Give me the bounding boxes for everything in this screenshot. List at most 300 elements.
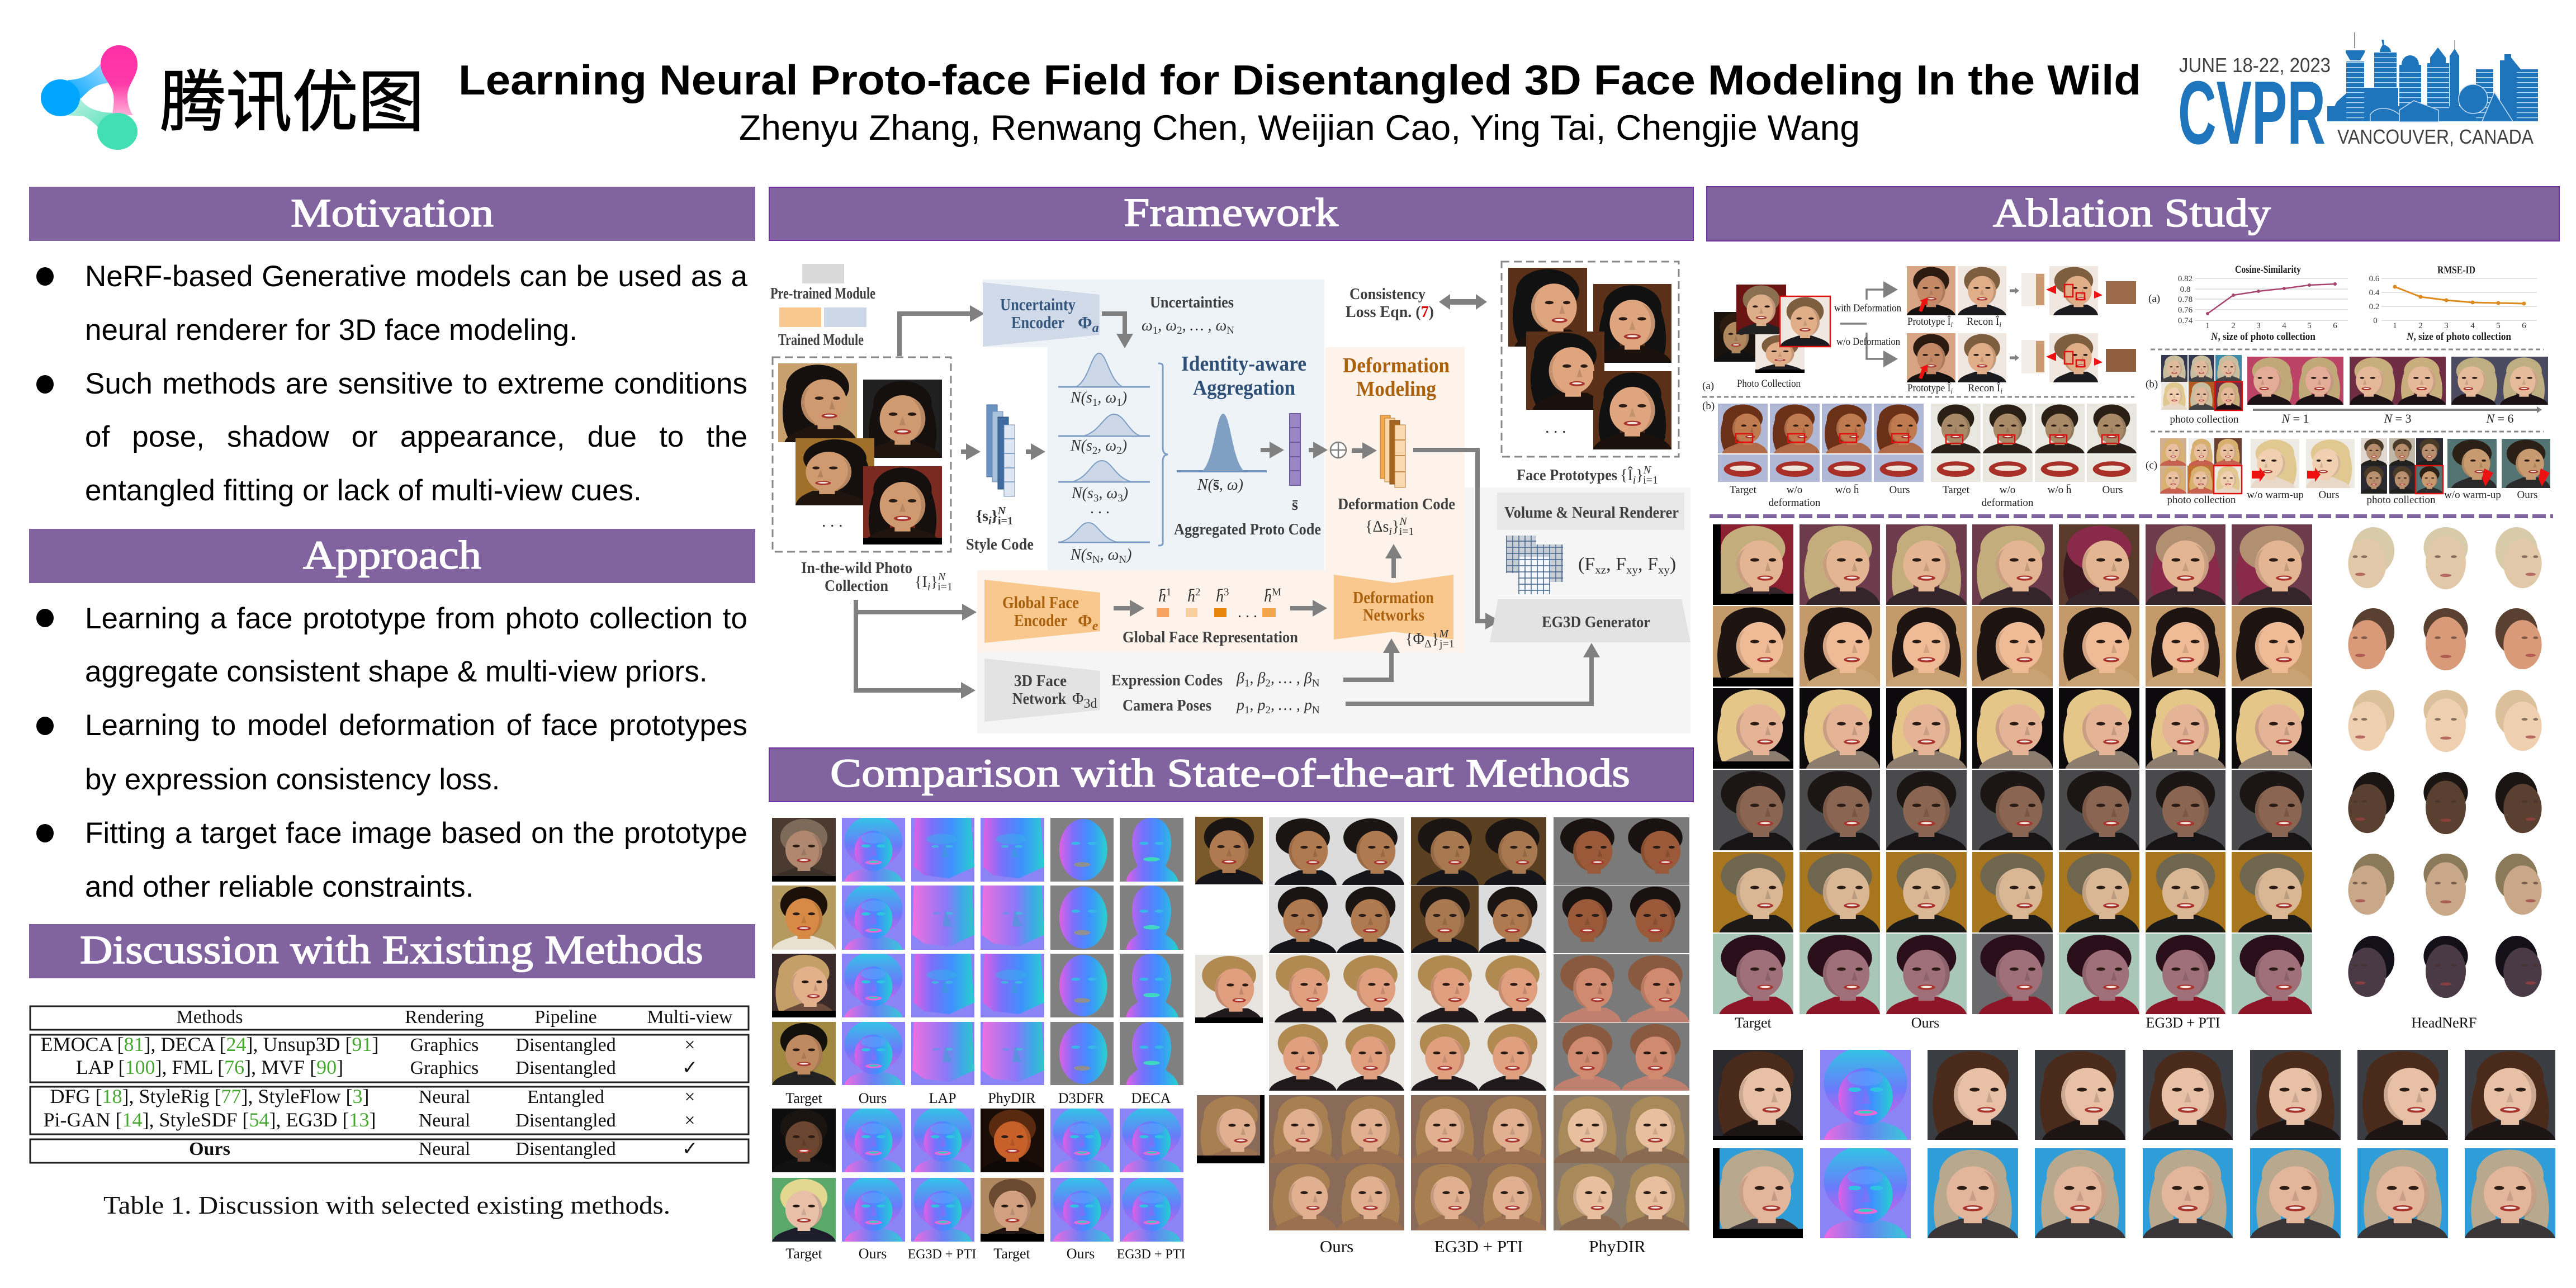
uncertainties: 1 [1153, 325, 1158, 337]
ablation c: warm-up: w/o warm-up [2247, 489, 2304, 501]
global face representation: h̄ [1264, 588, 1272, 605]
uncertainty encoder: Uncertainty [1000, 295, 1076, 314]
heading: Comparison with State-of-the-art Methods [769, 748, 1693, 802]
3D face network: Φ [1072, 690, 1083, 708]
volume and neural renderer: xz [1595, 563, 1606, 576]
volume and neural renderer: xy [1658, 563, 1670, 576]
input photo collection: . . . [822, 512, 843, 531]
style code stack: i [988, 515, 992, 527]
gaussian distributions: 3 [1093, 493, 1098, 504]
method labels: PhyDIR [988, 1090, 1036, 1106]
expression codes and camera poses [1111, 651, 1592, 716]
volume and neural renderer: , F [1638, 554, 1658, 575]
row: EG3D normals 2 [772, 1176, 1183, 1242]
chart: Cosine-Similarity: 4 [2282, 321, 2286, 330]
panel: novel view comparison [1195, 817, 1689, 1256]
gaussian distributions: N(s [1071, 437, 1092, 454]
with/without deformation branch: with Deformation [1834, 302, 1901, 314]
global face representation: 3 [1224, 586, 1229, 598]
consistency loss: Consistency [1349, 286, 1426, 303]
row: sunglasses woman [1713, 688, 2312, 769]
heading: Discussion with Existing Methods: Discussion with Existing Methods [80, 927, 703, 972]
panel: novel view results grid [1713, 524, 2542, 1031]
volume and neural renderer: , F [1606, 554, 1626, 575]
input labels: Collection [825, 577, 888, 595]
heading: Approach: Approach [303, 533, 481, 577]
gaussian distributions: N(s [1071, 546, 1092, 564]
chart: RMSE-ID: 2 [2418, 321, 2423, 330]
row: red jacket man [1713, 934, 2312, 1014]
table rows: × [684, 1035, 695, 1055]
volume and neural renderer: Volume & Neural Renderer [1504, 504, 1679, 522]
identity-aware aggregation: s̄ [1292, 496, 1298, 514]
deformation modeling: {Δs [1365, 518, 1389, 536]
deformation networks: j=1 [1439, 638, 1455, 650]
global face encoder: Global Face [1002, 593, 1079, 612]
without deformation results: i [2000, 387, 2002, 396]
method labels lower: Ours [859, 1246, 887, 1262]
arrows: from input [856, 314, 1125, 690]
face prototypes: N [1643, 464, 1652, 476]
ablation b: expression comparison: Ours [2103, 484, 2123, 496]
without deformation results: Prototype Î [1907, 382, 1955, 394]
table rows: Entangled [527, 1087, 604, 1107]
method labels [785, 1090, 1171, 1106]
uncertainty encoder: a [1092, 321, 1099, 335]
deformation networks: {Φ [1405, 631, 1424, 648]
chart: RMSE-ID: 4 [2470, 321, 2475, 330]
expression codes and camera poses: , β [1249, 670, 1265, 687]
table rows: ✓ [682, 1138, 698, 1160]
logo: tencent youtu [41, 45, 424, 150]
consistency loss [1346, 286, 1487, 321]
row: EG3D normals 1 [772, 1106, 1183, 1172]
uncertainties: , ω [1158, 317, 1177, 334]
method labels: DECA [1131, 1090, 1171, 1106]
3D face network: Network [1012, 690, 1066, 708]
person 2 [1269, 954, 1689, 1091]
gaussian distributions: N [1092, 554, 1100, 566]
global face representation: . . . [1238, 604, 1257, 621]
method labels lower: Ours [1067, 1246, 1095, 1262]
table rows: Disentangled [515, 1058, 616, 1078]
ablation b: photo collection size: photo collection [2170, 414, 2239, 425]
panel: normal map comparison [772, 816, 1185, 1262]
consistency loss: Loss Eqn. (7) [1346, 304, 1434, 321]
chart: Cosine-Similarity: 0.78 [2178, 295, 2193, 304]
table rows: Graphics [410, 1058, 479, 1078]
style code stack: Style Code [966, 536, 1034, 553]
gaussian distributions: , ω [1097, 389, 1116, 406]
gaussian distributions [1058, 353, 1168, 566]
gaussian distributions: , ω [1097, 437, 1116, 454]
ablation b: expression comparison: Ours [1890, 484, 1910, 496]
labels [1320, 1237, 1646, 1256]
table rows: ✓ [682, 1057, 698, 1079]
expression codes and camera poses: , p [1250, 697, 1266, 714]
chart: RMSE-ID: 0.6 [2369, 274, 2380, 283]
labels [1735, 1015, 2476, 1031]
heading: Discussion with Existing Methods [29, 924, 755, 978]
legend [770, 264, 875, 349]
input photo collection [773, 357, 951, 552]
ablation b: photo collection size: N = 3 [2383, 411, 2412, 425]
without deformation results: i [1950, 387, 1953, 396]
chart: Cosine-Similarity: Cosine-Similarity [2235, 264, 2301, 276]
text block: motivation bullets: neural renderer for 3D face modeling. [85, 314, 577, 347]
input labels: } [930, 574, 938, 591]
table caption: Table 1. Discussion with selected existing methods. [103, 1191, 670, 1219]
table rows: Disentangled [515, 1035, 616, 1055]
labels: EG3D + PTI [1434, 1237, 1523, 1256]
with deformation results [1907, 266, 2136, 329]
heading: Framework: Framework [1124, 190, 1338, 235]
row: shadowed man [1713, 770, 2312, 850]
face prototypes: Face Prototypes [1517, 467, 1617, 484]
gaussian distributions: 2 [1092, 445, 1097, 457]
uncertainties [1142, 294, 1234, 337]
style code stack [966, 405, 1034, 553]
chart: Cosine-Similarity: 0.8 [2180, 285, 2190, 294]
global face encoder: e [1092, 619, 1098, 633]
chart: RMSE-ID: 3 [2444, 321, 2449, 330]
labels: PhyDIR [1589, 1237, 1646, 1256]
input labels: i=1 [937, 581, 953, 593]
3D face network: 3d [1083, 697, 1097, 711]
method labels lower: Target [993, 1246, 1031, 1262]
uncertainties: N [1227, 325, 1234, 337]
global face representation [1114, 586, 1314, 646]
chart: RMSE-ID: 5 [2496, 321, 2501, 330]
chart: Cosine-Similarity: N, size of photo collection [2210, 331, 2315, 343]
chart: RMSE-ID: 1 [2393, 321, 2397, 330]
row: dark-hair woman [1713, 606, 2312, 686]
deformation networks: Δ [1424, 638, 1432, 650]
gaussian distributions: . . . [1090, 500, 1110, 517]
row: man with hand [772, 1020, 1183, 1085]
table header: Pipeline [534, 1007, 597, 1027]
heading: Ablation Study [1707, 187, 2559, 241]
chart: Cosine-Similarity: 6 [2333, 321, 2337, 330]
title: Learning Neural Proto-face Field for Disentangled 3D Face Modeling In the Wild [458, 56, 2141, 103]
gaussian distributions: 3 [1117, 493, 1123, 504]
CVPR wordmark: CVPR [2178, 63, 2326, 163]
authors: Zhenyu Zhang, Renwang Chen, Weijian Cao, Ying Tai, Chengjie Wang [739, 108, 1860, 148]
deformation modeling: N [1399, 515, 1408, 528]
uncertainties: 2 [1177, 325, 1182, 337]
uncertainty encoder: Encoder [1011, 312, 1064, 332]
expression codes and camera poses: β [1237, 670, 1244, 687]
gaussian distributions: , ω [1098, 485, 1117, 502]
heading: Approach [29, 529, 755, 583]
text block: motivation bullets: of pose, shadow or appearance, due to the [85, 420, 747, 453]
background regions [977, 280, 1690, 733]
icon: three-lobed logo mark [41, 45, 138, 150]
style code stack: i=1 [998, 515, 1013, 527]
face prototypes [1502, 262, 1679, 486]
face prototypes: i [1633, 474, 1636, 486]
labels: HeadNeRF [2412, 1015, 2476, 1031]
location: VANCOUVER, CANADA [2337, 125, 2534, 148]
row: blonde woman [1713, 524, 2312, 605]
table rows: EMOCA [81], DECA [24], Unsup3D [91] [40, 1033, 379, 1055]
input labels: i [927, 581, 930, 593]
expression codes and camera poses: N [1312, 678, 1320, 689]
chart: Cosine-Similarity: 1 [2205, 321, 2210, 330]
volume and neural renderer: xy [1626, 563, 1638, 576]
uncertainty encoder [983, 282, 1100, 347]
ablation b: expression comparison: Target [1943, 484, 1970, 496]
chart: Cosine-Similarity [2178, 264, 2348, 343]
deformation modeling: Deformation Code [1338, 496, 1455, 513]
chart: RMSE-ID: 6 [2522, 321, 2526, 330]
face prototypes: . . . [1545, 418, 1566, 437]
table header: Methods [177, 1007, 243, 1027]
identity-aware aggregation: N(s̄, ω) [1197, 476, 1243, 494]
uncertainties: ω [1142, 317, 1153, 334]
global face representation: 2 [1195, 586, 1201, 598]
table rows: × [684, 1087, 695, 1107]
global face representation: h̄ [1158, 588, 1166, 605]
chart: Cosine-Similarity: 0.82 [2178, 274, 2193, 283]
chart: Cosine-Similarity: 3 [2256, 321, 2261, 330]
deformation networks: } [1432, 631, 1439, 648]
global face encoder: Encoder [1014, 610, 1067, 630]
table rows: × [684, 1110, 695, 1131]
expression codes and camera poses: p [1237, 697, 1244, 714]
ablation b: photo collection size: (b) [2146, 378, 2158, 390]
row: grandmother [772, 816, 1183, 882]
ablation c: warm-up: w/o warm-up [2444, 489, 2501, 501]
gaussian distributions: , ω [1100, 546, 1119, 564]
with deformation results: Prototype Î [1907, 316, 1955, 328]
deformation modeling: i=1 [1399, 525, 1414, 538]
expression codes and camera poses: 1 [1244, 678, 1249, 689]
without deformation results: Recon Î [1968, 382, 2001, 394]
text block: approach bullets: aggregate consistent shape & multi-view priors. [85, 655, 708, 688]
table frames [30, 1006, 749, 1163]
icon: Vancouver skyline [2327, 32, 2538, 122]
EG3D generator [1490, 599, 1690, 642]
style code stack: {s [976, 508, 988, 525]
chart: RMSE-ID [2369, 264, 2537, 343]
global face encoder: Φ [1078, 610, 1092, 630]
face prototypes: } [1636, 467, 1644, 484]
EG3D generator: EG3D Generator [1542, 614, 1650, 631]
3D face network: 3D Face [1014, 673, 1067, 690]
ablation b: photo collection size [2146, 355, 2548, 425]
text block: motivation bullets [36, 260, 747, 507]
chart: RMSE-ID: 0 [2373, 316, 2378, 325]
panel: methods comparison table [30, 1006, 749, 1163]
photo collection [1702, 285, 1830, 392]
global face representation: Global Face Representation [1123, 629, 1298, 646]
gaussian distributions: 1 [1092, 397, 1097, 409]
expression codes and camera poses: 2 [1265, 678, 1271, 689]
chart: RMSE-ID: N, size of photo collection [2406, 331, 2511, 343]
deformation modeling [1309, 354, 1487, 621]
text block: approach bullets: and other reliable constraints. [85, 870, 473, 903]
ablation c: warm-up: Ours [2517, 489, 2537, 501]
targets [1195, 817, 1265, 1163]
deformation networks: Deformation [1353, 588, 1434, 607]
chart: Cosine-Similarity: 5 [2307, 321, 2312, 330]
labels: Target [1735, 1015, 1772, 1031]
method labels lower: EG3D + PTI [908, 1247, 976, 1262]
panel: ablation charts: (a) [2148, 293, 2160, 305]
ablation b: expression comparison: w/o [2000, 484, 2015, 496]
row: young man [772, 883, 1183, 950]
person 3 [1269, 1095, 1689, 1230]
ablation c: warm-up: photo collection [2167, 494, 2236, 506]
chart: Cosine-Similarity: 2 [2231, 321, 2236, 330]
global face representation: M [1272, 586, 1281, 598]
row: blonde smiling woman [1713, 1145, 2555, 1238]
uncertainty encoder: Φ [1078, 312, 1092, 332]
text block: approach bullets: Learning to model deformation of face prototypes [85, 709, 747, 742]
heading: Ablation Study: Ablation Study [1993, 191, 2271, 235]
bullet 1 [36, 609, 54, 627]
ablation b: expression comparison: w/o [1787, 484, 1802, 496]
gaussian distributions: ) [1121, 437, 1127, 454]
table rows [40, 1033, 698, 1160]
panel: ablation deformation [1702, 266, 2137, 509]
deformation modeling: Deformation [1343, 354, 1450, 377]
logo: CVPR 2023 Vancouver [2178, 32, 2538, 163]
deformation networks [1334, 575, 1455, 650]
gaussian distributions: 1 [1116, 397, 1122, 409]
bullet 2 [36, 717, 54, 735]
table rows: Disentangled [515, 1139, 616, 1159]
with/without deformation branch [1834, 290, 1901, 359]
labels: EG3D + PTI [2146, 1015, 2220, 1031]
text block: motivation bullets: NeRF-based Generative models can be used as a [85, 260, 747, 293]
face prototypes: i=1 [1643, 474, 1658, 486]
table rows: Pi-GAN [14], StyleSDF [54], EG3D [13] [44, 1109, 376, 1131]
volume and neural renderer: (F [1578, 554, 1595, 575]
chart: Cosine-Similarity: 0.74 [2178, 316, 2193, 325]
without deformation results [1907, 333, 2136, 396]
with deformation results: Recon Î [1967, 316, 2000, 328]
chart: RMSE-ID: 0.2 [2369, 302, 2379, 311]
gaussian distributions: N(s [1072, 485, 1093, 502]
heading: Framework [769, 187, 1693, 240]
deformation modeling: Modeling [1356, 377, 1436, 401]
ablation b: expression comparison: deformation [1982, 497, 2034, 509]
deformation modeling: i [1389, 525, 1392, 538]
expression codes and camera poses: N [1312, 704, 1320, 716]
ablation b: expression comparison: w/o h̄ [1835, 484, 1859, 496]
ablation b: expression comparison [1702, 400, 2137, 509]
heading: Comparison with State-of-the-art Methods: Comparison with State-of-the-art Methods [830, 751, 1630, 795]
text block: motivation bullets: Such methods are sensitive to extreme conditions [85, 367, 747, 400]
table rows: LAP [100], FML [76], MVF [90] [76, 1056, 343, 1078]
ablation b: expression comparison: (b) [1702, 400, 1715, 412]
expression codes and camera poses: , … , β [1271, 670, 1312, 687]
ablation c: warm-up: photo collection [2367, 494, 2436, 506]
row: short-hair man [1713, 852, 2312, 932]
gaussian distributions: ) [1122, 485, 1128, 502]
identity-aware aggregation: Aggregation [1193, 376, 1295, 400]
panel: framework diagram [770, 262, 1690, 733]
text block: approach bullets: Fitting a target face image based on the prototype [85, 817, 747, 850]
with deformation results: i [1999, 321, 2001, 329]
3D face network [984, 659, 1100, 722]
gaussian distributions: N [1119, 554, 1126, 566]
heading: Motivation: Motivation [291, 191, 494, 235]
style code stack: } [992, 508, 998, 525]
gaussian distributions: N(s [1071, 389, 1092, 406]
with deformation results: i [1950, 321, 1953, 329]
table rows: Ours [189, 1139, 230, 1159]
ablation b: expression comparison: w/o h̄ [2048, 484, 2072, 496]
legend: Pre-trained Module [770, 285, 875, 302]
expression codes and camera poses: , … , p [1271, 697, 1312, 714]
method labels lower [785, 1246, 1185, 1262]
ablation b: photo collection size: N = 1 [2281, 411, 2309, 425]
photo collection: (a) [1702, 380, 1714, 392]
identity-aware aggregation: Aggregated Proto Code [1174, 521, 1321, 538]
person 1 [1269, 817, 1689, 953]
deformation modeling: } [1392, 518, 1399, 536]
chart: RMSE-ID: RMSE-ID [2437, 264, 2475, 276]
method labels: Target [785, 1090, 823, 1106]
ablation c: warm-up: Ours [2319, 489, 2339, 501]
chart: RMSE-ID: 0.4 [2369, 288, 2380, 297]
expression codes and camera poses: Camera Poses [1123, 697, 1211, 714]
table rows: Neural [419, 1139, 470, 1159]
identity-aware aggregation: Identity-aware [1181, 352, 1306, 376]
ablation b: expression comparison: Target [1730, 484, 1757, 496]
method labels: LAP [929, 1090, 956, 1106]
method labels: Ours [859, 1090, 887, 1106]
ablation c: warm-up [2146, 438, 2550, 506]
volume and neural renderer: ) [1670, 554, 1676, 575]
method labels lower: EG3D + PTI [1117, 1247, 1185, 1262]
table rows: Disentangled [515, 1110, 616, 1131]
HeadNeRF results [2348, 527, 2542, 998]
global face representation: 1 [1166, 586, 1172, 598]
panel: high-quality bottom rows [1713, 1047, 2555, 1238]
global face encoder [984, 580, 1100, 643]
table header: Rendering [405, 1007, 484, 1027]
text block: approach bullets: Learning a face prototype from photo collection to [85, 602, 747, 635]
global face representation: h̄ [1187, 588, 1195, 605]
bullet 1 [36, 267, 54, 286]
gaussian distributions: ) [1125, 546, 1131, 564]
heading: Motivation [29, 187, 755, 241]
face prototypes: {Î [1620, 467, 1633, 484]
table rows: Neural [419, 1110, 470, 1131]
ablation b: photo collection size: N = 6 [2485, 411, 2514, 425]
labels: Ours [1320, 1237, 1353, 1256]
deformation networks: Networks [1363, 605, 1424, 624]
table header [177, 1007, 733, 1027]
uncertainties: Uncertainties [1150, 294, 1234, 311]
global face representation: h̄ [1216, 588, 1224, 605]
table rows: DFG [18], StyleRig [77], StyleFlow [3] [50, 1085, 370, 1107]
logo wordmark: 腾讯优图 [160, 65, 424, 140]
input labels: In-the-wild Photo [801, 560, 912, 577]
input labels: N [937, 571, 946, 583]
method labels: D3DFR [1058, 1090, 1105, 1106]
gaussian distributions: 2 [1116, 445, 1122, 457]
expression codes and camera poses: Expression Codes [1111, 672, 1223, 689]
labels: Ours [1911, 1015, 1939, 1031]
table rows: Neural [419, 1087, 470, 1107]
legend: Trained Module [778, 332, 864, 349]
identity-aware aggregation [1174, 352, 1321, 538]
